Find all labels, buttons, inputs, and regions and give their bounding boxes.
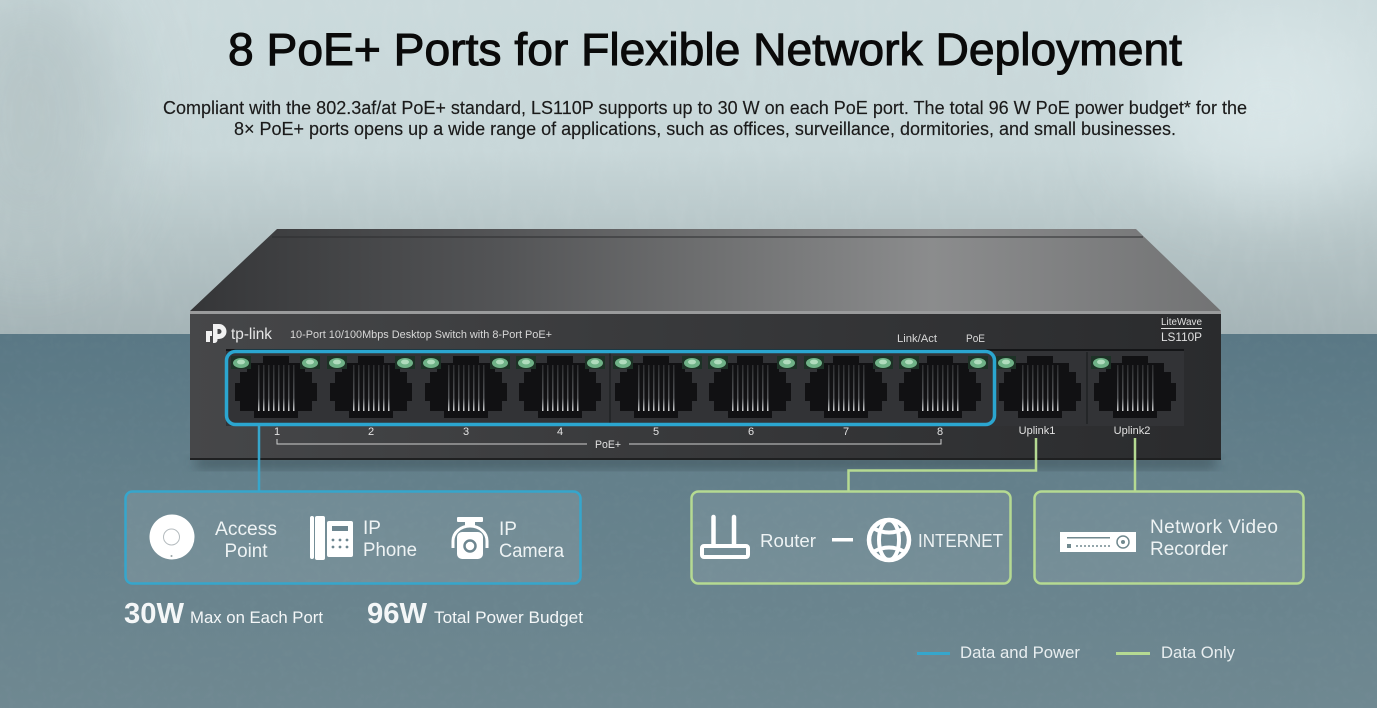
- LiteWave model badge: LiteWave: [1161, 317, 1202, 328]
- port LEDs: [231, 356, 1111, 369]
- description: [163, 98, 1247, 139]
- stat: 30W max on each port: [124, 598, 323, 630]
- label: access point: [215, 519, 277, 562]
- background wall: [0, 0, 1377, 334]
- switch front face: [190, 311, 1221, 460]
- switch shadow: [196, 458, 1216, 467]
- PoE+ bracket: [277, 439, 941, 451]
- LiteWave model badge: LS110P: [1161, 330, 1202, 344]
- label: IP camera: Camera: [499, 541, 564, 562]
- description: Compliant with the 802.3af/at PoE+ standard, LS110P supports up to 30 W on each PoE port. The total 96 W PoE power budget* for the: [163, 98, 1247, 118]
- port numbers: 3: [463, 426, 469, 438]
- connector: uplink1 to router: [848, 438, 1036, 491]
- background floor: [0, 334, 1377, 708]
- label: access point: Access: [215, 519, 277, 540]
- label: network video recorder: Network Video: [1150, 517, 1278, 538]
- PoE+ bracket: PoE+: [595, 439, 621, 451]
- icon: router: [702, 517, 748, 557]
- label: network video recorder: Recorder: [1150, 539, 1229, 560]
- port numbers: 2: [368, 426, 374, 438]
- network switch: [190, 229, 1221, 460]
- port numbers: 7: [843, 426, 849, 438]
- label: router: Router: [760, 531, 816, 551]
- stat: 96W total power budget: [367, 598, 583, 630]
- label: IP phone: IP: [363, 518, 381, 539]
- label: access point: Point: [224, 541, 268, 562]
- port numbers: Uplink2: [1114, 425, 1150, 437]
- stat: 30W max on each port: 30W: [124, 598, 185, 630]
- connector: uplink2 to recorder: [1134, 438, 1136, 491]
- legend: data and power: Data and Power: [960, 643, 1080, 662]
- LiteWave model badge: [1161, 317, 1202, 344]
- panel: powered devices: [126, 492, 580, 584]
- switch model description: 10-Port 10/100Mbps Desktop Switch with 8-Port PoE+: [290, 329, 552, 341]
- label: IP phone: Phone: [363, 540, 417, 561]
- ethernet ports: [235, 356, 1176, 418]
- icon: video recorder: [1060, 532, 1136, 552]
- tp-link logo: tp-link: [231, 326, 273, 343]
- description: 8× PoE+ ports opens up a wide range of applications, such as offices, surveillance, dormitories, and small businesses.: [234, 119, 1176, 139]
- LED labels: PoE: [966, 333, 985, 345]
- port highlight frame: [226, 352, 994, 424]
- tp-link logo: [206, 324, 273, 343]
- connector dash: [832, 538, 853, 542]
- port numbers: [274, 425, 1150, 438]
- connector: data and power: [258, 425, 260, 491]
- label: IP phone: [363, 518, 417, 561]
- label: IP camera: IP: [499, 519, 517, 540]
- legend: data only: Data Only: [1161, 643, 1235, 662]
- icon: internet globe: [869, 520, 909, 560]
- label: internet: INTERNET: [918, 531, 1003, 551]
- switch top face: [190, 229, 1221, 311]
- port numbers: 5: [653, 426, 659, 438]
- port numbers: 1: [274, 426, 280, 438]
- LED labels: [897, 333, 985, 345]
- LED labels: Link/Act: [897, 333, 937, 345]
- port numbers: 4: [557, 426, 563, 438]
- stat: 30W max on each port: Max on Each Port: [190, 608, 323, 627]
- panel: network video recorder: [1034, 492, 1304, 584]
- panel: router and internet: [692, 492, 1010, 584]
- title: 8 PoE+ Ports for Flexible Network Deployment: [228, 24, 1183, 75]
- icon: access point: [150, 514, 194, 560]
- legend: data only: [1116, 643, 1235, 662]
- stat: 96W total power budget: Total Power Budget: [434, 608, 583, 627]
- icon: IP phone: [310, 516, 353, 560]
- port numbers: Uplink1: [1019, 425, 1055, 437]
- label: IP camera: [499, 519, 564, 562]
- port numbers: 6: [748, 426, 754, 438]
- label: network video recorder: [1150, 517, 1278, 560]
- stat: 96W total power budget: 96W: [367, 598, 428, 630]
- port numbers: 8: [937, 426, 943, 438]
- icon: IP camera: [453, 517, 487, 559]
